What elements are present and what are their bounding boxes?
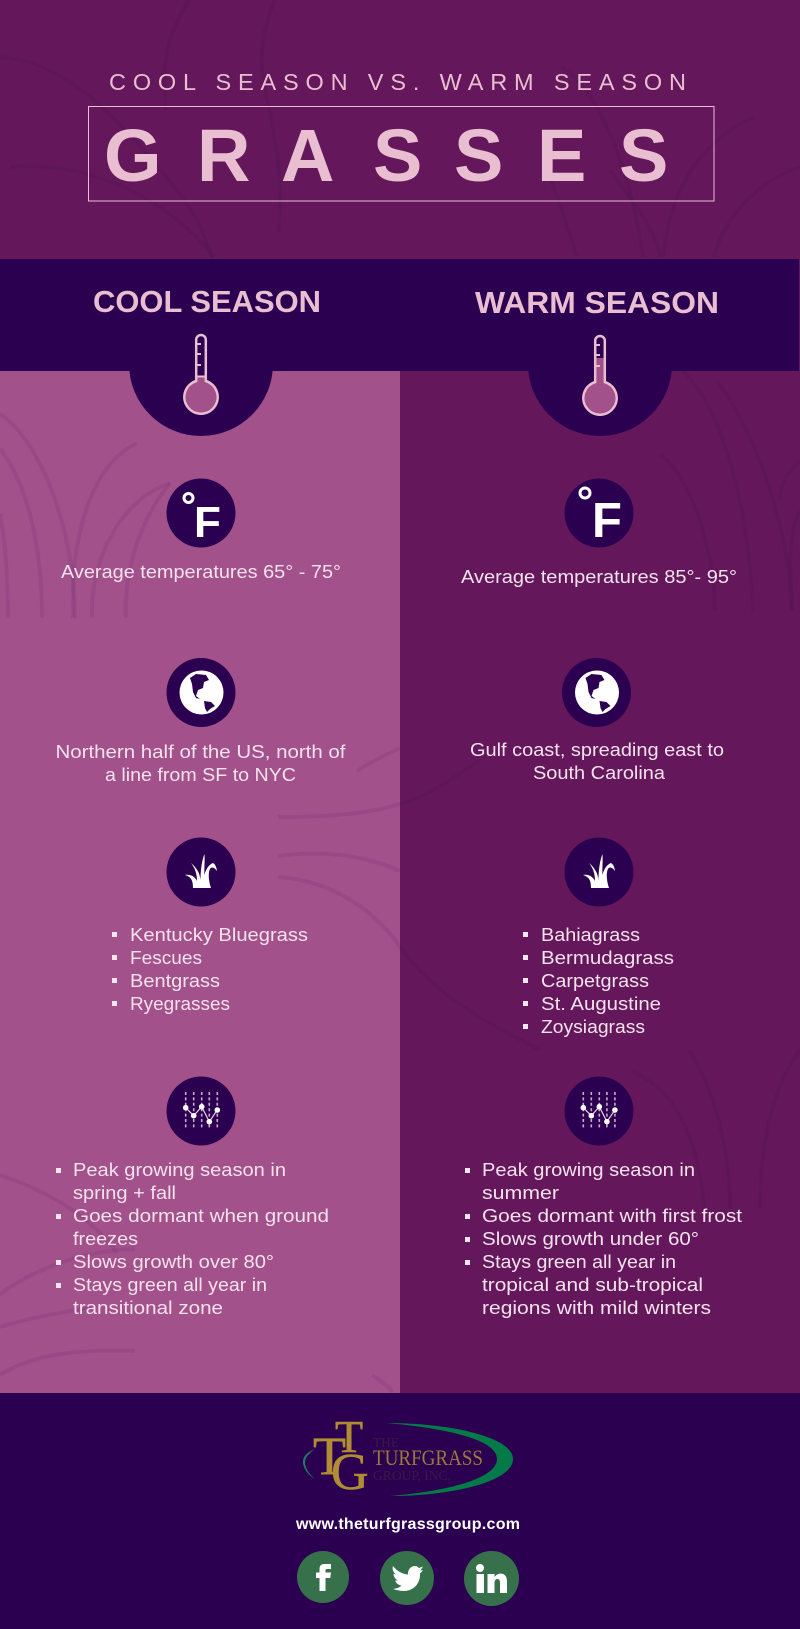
icon: linkedin	[464, 1551, 519, 1606]
list: warm varieties: Carpetgrass	[541, 971, 649, 991]
list: cool growth: spring + fall	[73, 1183, 176, 1203]
icon: fahrenheit warm	[564, 478, 634, 548]
list: cool growth: Slows growth over 80°	[73, 1252, 274, 1272]
list: cool varieties	[112, 925, 308, 1014]
list: warm varieties: Bahiagrass	[541, 925, 640, 945]
heading: cool season: COOL SEASON	[93, 284, 321, 319]
title box	[88, 106, 714, 201]
list: cool growth: Stays green all year in	[73, 1275, 267, 1295]
list: cool growth: freezes	[73, 1229, 138, 1249]
icon: thermometer warm	[583, 336, 617, 415]
logo: G	[331, 1444, 369, 1501]
list: warm growth: regions with mild winters	[482, 1298, 711, 1318]
list: warm growth: Stays green all year in	[482, 1252, 676, 1272]
list: warm growth: summer	[482, 1183, 559, 1203]
list: warm growth: Slows growth under 60°	[482, 1229, 699, 1249]
logo: THE	[373, 1436, 399, 1451]
list: cool growth	[56, 1160, 329, 1318]
panel: cool season background	[0, 371, 400, 1393]
text: warm temperatures: Average temperatures 85°- 95°	[461, 567, 737, 587]
icon: growth chart warm	[564, 1076, 634, 1146]
list: cool varieties: Ryegrasses	[130, 994, 230, 1014]
list: warm varieties: St. Augustine	[541, 994, 661, 1014]
list: cool growth: Goes dormant when ground	[73, 1206, 329, 1226]
text: cool region	[56, 742, 347, 785]
text: cool region: a line from SF to NYC	[105, 765, 296, 785]
icon: globe cool	[166, 658, 236, 727]
list: warm varieties: Bermudagrass	[541, 948, 674, 968]
subtitle: COOL SEASON VS. WARM SEASON	[109, 69, 686, 95]
text: warm region	[470, 740, 724, 783]
text: warm region: South Carolina	[533, 763, 666, 783]
list: warm growth: Goes dormant with first frost	[482, 1206, 742, 1226]
icon: fahrenheit cool: F	[194, 498, 221, 547]
icon: twitter	[380, 1551, 434, 1605]
list: cool growth: transitional zone	[73, 1298, 223, 1318]
heading: warm season: WARM SEASON	[475, 285, 719, 320]
list: cool growth: Peak growing season in	[73, 1160, 286, 1180]
panel: warm season background	[400, 371, 800, 1393]
icon: grass cool	[166, 838, 236, 906]
list: warm growth: tropical and sub-tropical	[482, 1275, 703, 1295]
list: warm growth	[465, 1160, 742, 1318]
list: cool varieties: Fescues	[130, 948, 202, 968]
website url: www.theturfgrassgroup.com	[295, 1516, 520, 1533]
icon: thermometer cool	[184, 335, 218, 414]
icon: globe warm	[562, 658, 631, 727]
logo: TURFGRASS	[373, 1445, 483, 1470]
logo: GROUP, INC.	[373, 1469, 451, 1484]
list: cool varieties: Bentgrass	[130, 971, 220, 991]
logo: T	[313, 1426, 346, 1486]
icon: facebook	[297, 1551, 349, 1603]
icon: growth chart cool	[166, 1076, 236, 1146]
list: warm growth: Peak growing season in	[482, 1160, 695, 1180]
header band	[0, 259, 799, 436]
footer band	[0, 1393, 800, 1629]
logo	[303, 1411, 513, 1501]
icon: fahrenheit warm: F	[592, 494, 622, 548]
list: warm varieties	[523, 925, 674, 1037]
title: GRASSES	[104, 114, 668, 197]
icon: fahrenheit cool	[166, 478, 236, 548]
text: warm region: Gulf coast, spreading east to	[470, 740, 724, 760]
logo: T	[335, 1411, 363, 1462]
list: warm varieties: Zoysiagrass	[541, 1017, 645, 1037]
text: cool region: Northern half of the US, north of	[56, 742, 347, 762]
list: cool varieties: Kentucky Bluegrass	[130, 925, 308, 945]
icon: grass warm	[564, 838, 634, 906]
text: cool temperatures: Average temperatures 65° - 75°	[61, 562, 341, 582]
